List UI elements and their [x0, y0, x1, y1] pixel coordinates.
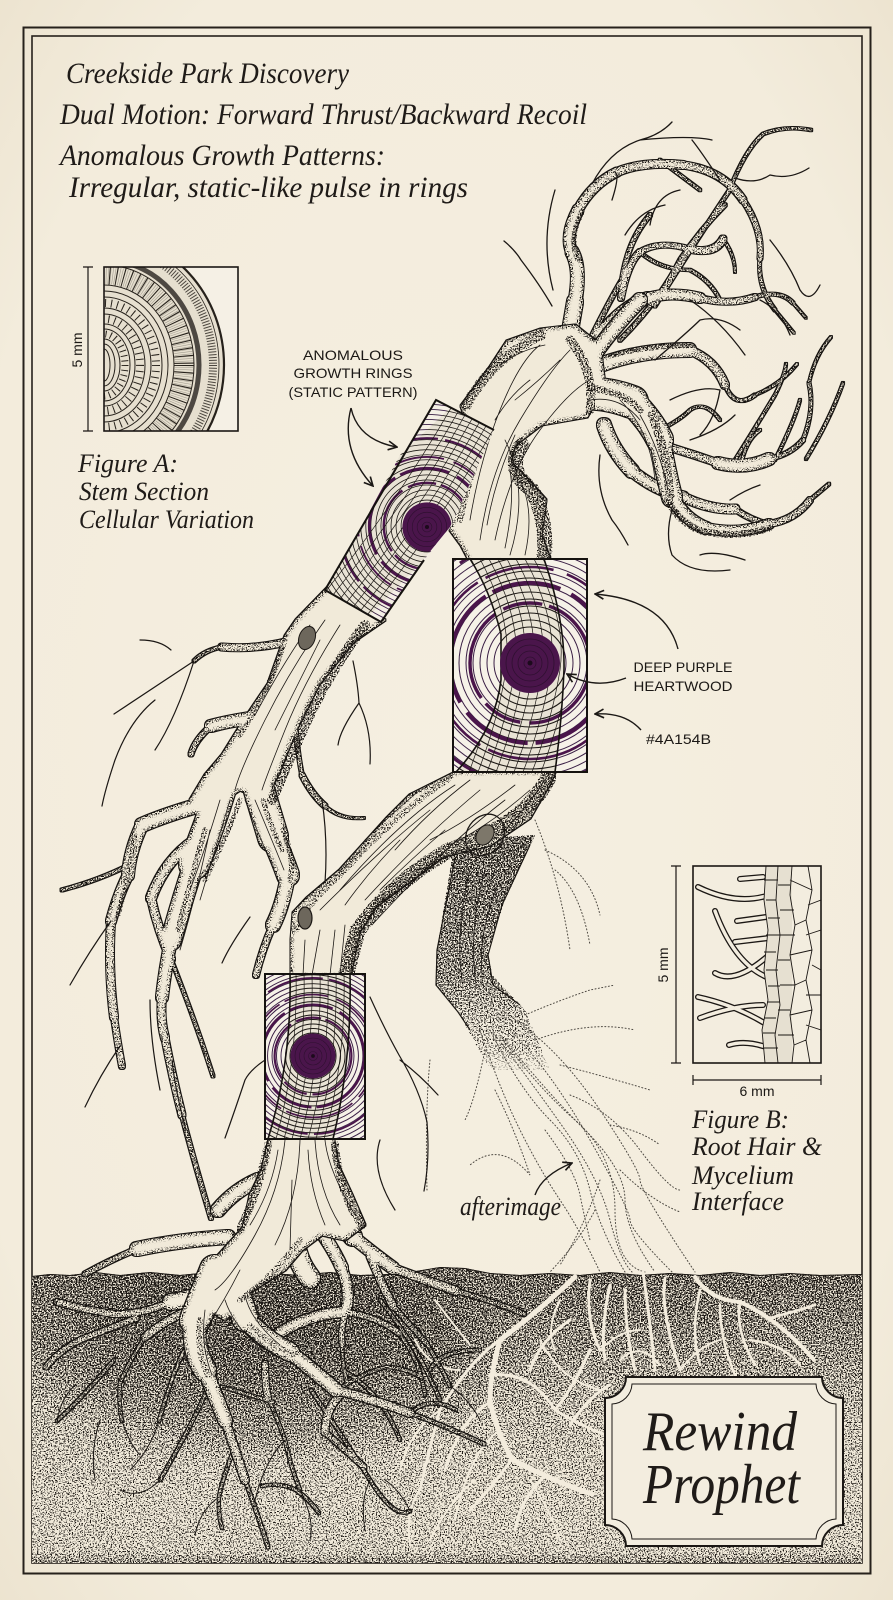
heading notes [58, 57, 587, 204]
figure B caption: Figure B: [691, 1105, 789, 1134]
figure B inset: root hair interface [693, 866, 821, 1063]
anomalous ring section: lower box [264, 973, 366, 1140]
figure A caption: Cellular Variation [79, 505, 254, 534]
label: deep purple heartwood: HEARTWOOD [634, 678, 732, 694]
figure B caption: Mycelium [691, 1161, 794, 1190]
fine root hairs in pale soil [57, 1385, 480, 1540]
label: anomalous growth rings: GROWTH RINGS [294, 365, 412, 381]
figure B scale bars: 6 mm [740, 1083, 774, 1099]
label: anomalous growth rings [288, 347, 418, 400]
figure A caption: Stem Section [79, 477, 209, 506]
title plaque: Prophet [642, 1454, 801, 1516]
figure B caption [691, 1105, 823, 1216]
heading notes: Dual Motion: Forward Thrust/Backward Recoil [59, 98, 587, 131]
soil cross-section with stipple [32, 1267, 862, 1563]
figure A caption [77, 449, 254, 534]
arrows: growth rings [348, 408, 397, 486]
trunk bark grain and knots, lower [298, 780, 545, 975]
trunk and crown bark shading [460, 212, 769, 560]
figure A scale bar: 5 mm [69, 332, 85, 368]
label: deep purple heartwood [634, 659, 732, 694]
heading notes: Irregular, static-like pulse in rings [68, 171, 468, 204]
arrows: heartwood [567, 594, 678, 730]
afterimage label: afterimage [460, 1192, 561, 1221]
upper trunk mass and crown front limbs [450, 300, 829, 562]
crown twigs [504, 122, 820, 571]
lower trunk between boxes [291, 772, 555, 976]
crown branches, back layer [569, 128, 843, 525]
root bark grain [204, 1140, 355, 1375]
root stipple shading [199, 1145, 362, 1375]
root flare and underground roots, back [46, 1180, 524, 1528]
left limb shading, grain and twigs [70, 620, 438, 1210]
heading notes: Anomalous Growth Patterns: [58, 139, 385, 172]
arrow: afterimage [535, 1163, 572, 1195]
figure B caption: Interface [691, 1187, 784, 1216]
trunk bark grain, upper [470, 345, 668, 555]
figure A inset: stem section [103, 266, 239, 432]
figure A scale bar [69, 267, 93, 431]
label: anomalous growth rings: ANOMALOUS [303, 347, 403, 363]
figure B caption: Root Hair & [691, 1132, 823, 1161]
root flare and main roots, front [192, 1135, 484, 1547]
label: deep purple heartwood: DEEP PURPLE [634, 659, 732, 675]
anomalous ring section: central box [452, 558, 588, 773]
pale mycelium afterimage roots in soil [400, 1272, 815, 1545]
figure B scale bars [655, 866, 821, 1099]
figure A caption: Figure A: [77, 449, 178, 478]
figure B scale bars: 5 mm [655, 948, 671, 982]
heading notes: Creekside Park Discovery [66, 57, 350, 90]
afterimage: faded trunk stipple and dotted roots [426, 820, 695, 1272]
label: colour hex: #4A154B [646, 731, 711, 747]
title plaque: Rewind [642, 1401, 798, 1463]
title plaque [605, 1377, 843, 1546]
hanging left limb with fingers [62, 585, 385, 1218]
lower trunk stipple shading [296, 778, 548, 976]
label: anomalous growth rings: (STATIC PATTERN) [288, 384, 418, 400]
anomalous ring section: upper branch (tilted box) [324, 398, 494, 624]
